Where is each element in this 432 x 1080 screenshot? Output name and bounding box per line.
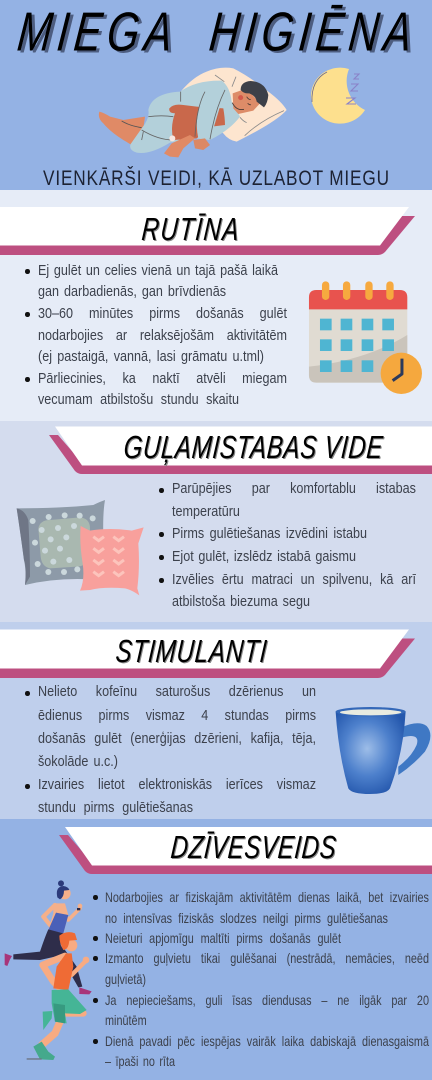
text block: rutina bullets: nodarbojies ar relaksējošām aktivitātēm [38, 327, 287, 344]
section ribbon: bedroom environment [49, 426, 432, 474]
heading: rutina: RUTĪNA [141, 213, 241, 249]
text block: lifestyle bullets: guļvietā) [105, 971, 146, 987]
text block: bedroom bullets: Izvēlies ērtu matraci un spilvenu, kā arī [172, 571, 416, 588]
text block: bedroom bullets [159, 480, 416, 610]
text block: lifestyle bullets: Dienā pavadi pēc iespējas vairāk laika dabiskajā dienasgaismā [105, 1033, 429, 1049]
section ribbon: stimulants [0, 630, 415, 678]
subtitle: VIENKĀRŠI VEIDI, KĀ UZLABOT MIEGU [43, 166, 389, 190]
icon: crescent moon with Z letters [311, 68, 365, 124]
text block: rutina bullets: 30–60 minūtes pirms došanās gulēt [38, 305, 287, 322]
icon: blue mug [336, 707, 430, 794]
panel: rutina background [0, 190, 432, 421]
text block: stimulants bullets: Nelieto kofeīnu saturošus dzērienus un [38, 683, 316, 700]
text block: bedroom bullets: temperatūru [172, 503, 240, 520]
section ribbon: rutina [0, 207, 415, 255]
title: MIEGA HIGIĒNA [15, 2, 415, 63]
text block: bedroom bullets: Parūpējies par komfortablu istabas [172, 480, 416, 497]
text block: lifestyle bullets: – īpaši no rīta [105, 1053, 175, 1069]
icon: sleeping person [99, 68, 287, 157]
text block: rutina bullets: gan darbadienās, gan brīvdienās [38, 283, 226, 300]
panel: stimulants background [0, 622, 432, 819]
text block: lifestyle bullets: Izmanto guļvietu tikai gulēšanai (nestrādā, nemācies, neēd [105, 950, 429, 966]
woman runner [5, 880, 92, 994]
text block: bedroom bullets: atbilstoša biezuma segu [172, 593, 310, 610]
section ribbon: lifestyle [59, 827, 432, 874]
text block: stimulants bullets: Izvairies lietot elektroniskās ierīces vismaz [38, 776, 316, 793]
text block: bedroom bullets: Pirms gulētiešanas izvēdini istabu [172, 525, 367, 542]
text block: rutina bullets: vecumam atbilstošu stundu skaitu [38, 391, 239, 408]
icon: two runners [5, 880, 92, 1060]
text block: stimulants bullets: došanās gulēt (enerģijas dzērieni, kafija, tēja, [38, 730, 316, 747]
heading: lifestyle: DZĪVESVEIDS [169, 830, 337, 866]
panel: lifestyle background [0, 819, 432, 1080]
text block: lifestyle bullets: Nodarbojies ar fiziskajām aktivitātēm dienas laikā, bet izvairies [105, 889, 429, 905]
panel: bedroom background [0, 421, 432, 622]
text block: bedroom bullets: Ejot gulēt, izslēdz istabā gaismu [172, 548, 356, 565]
text block: lifestyle bullets: no intensīvas fiziskās slodzes neilgi pirms gulētiešanas [105, 910, 388, 926]
text block: rutina bullets: (ej pastaigā, vannā, lasi grāmatu u.tml) [38, 348, 264, 365]
icon: pillows [17, 500, 144, 595]
title: MIEGA HIGIĒNA [18, 4, 418, 65]
text block: lifestyle bullets: Neieturi apjomīgu maltīti pirms došanās gulēt [105, 930, 341, 946]
text block: lifestyle bullets: minūtēm [105, 1012, 147, 1028]
text block: rutina bullets [25, 262, 287, 408]
text block: lifestyle bullets: Ja nepieciešams, guli īsas diendusas – ne ilgāk par 20 [105, 992, 429, 1008]
text block: rutina bullets: Pārliecinies, ka naktī atvēli miegam [38, 370, 287, 387]
heading: lifestyle: DZĪVESVEIDS [170, 831, 338, 867]
heading: rutina: RUTĪNA [140, 212, 240, 248]
text block: rutina bullets: Ej gulēt un celies vienā un tajā pašā laikā [38, 262, 278, 279]
heading: bedroom environment: GUĻAMISTABAS VIDE [122, 430, 385, 466]
heading: stimulants: STIMULANTI [115, 635, 269, 671]
panel: header background [0, 0, 432, 190]
icon: calendar with clock [309, 281, 422, 394]
text block: stimulants bullets: stundu pirms gulētiešanas [38, 799, 193, 816]
man runner [27, 932, 89, 1060]
text block: lifestyle bullets [93, 889, 429, 1069]
heading: stimulants: STIMULANTI [114, 634, 268, 670]
text block: stimulants bullets [25, 683, 316, 816]
heading: bedroom environment: GUĻAMISTABAS VIDE [123, 431, 386, 467]
text block: stimulants bullets: ēdienus pirms vismaz 4 stundas pirms [38, 707, 316, 724]
text block: stimulants bullets: šokolāde u.c.) [38, 753, 118, 770]
